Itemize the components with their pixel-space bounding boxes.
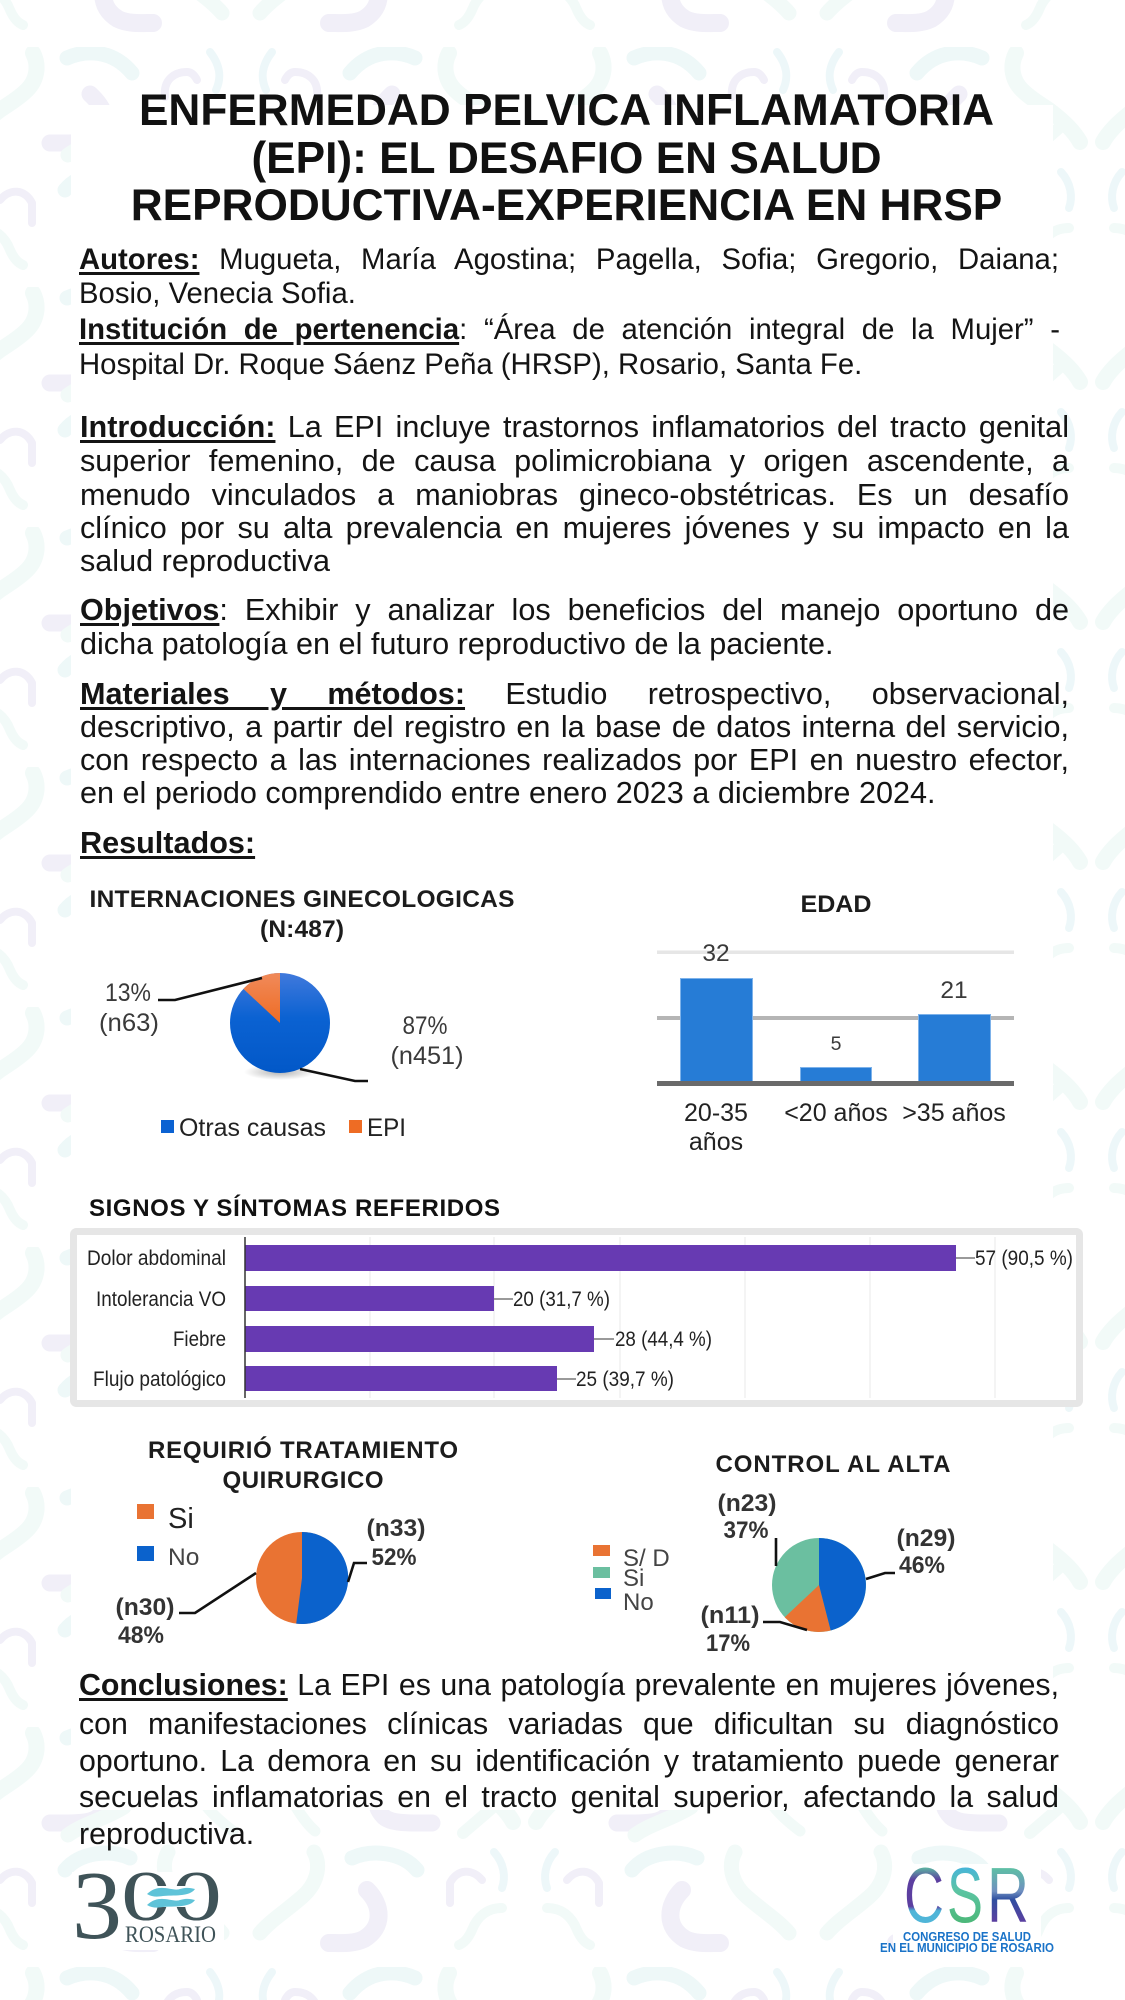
chart: requirio tratamiento quirurgico: [116, 1436, 458, 1649]
objectives: [80, 593, 1069, 661]
objectives: Objetivos: Exhibir y analizar los beneficios del manejo oportuno de: [80, 593, 1069, 627]
value labels: 20 (31,7 %): [513, 1287, 610, 1311]
conclusions: secuelas inflamatorias en el tracto genital superior, afectando la salud: [79, 1781, 1059, 1814]
chart title: [90, 886, 514, 943]
pie labels: [700, 1490, 956, 1657]
logo: CSR congreso de salud: [880, 1851, 1054, 1955]
category labels: Dolor abdominal: [87, 1246, 226, 1270]
chart title: INTERNACIONES GINECOLOGICAS: [90, 886, 514, 913]
pie legend: Otras causas: [179, 1114, 326, 1142]
chart: edad bars: [657, 891, 1014, 1156]
chart: signos y sintomas: [74, 1194, 1080, 1404]
chart: control al alta: [593, 1451, 956, 1657]
pie labels: (n33): [366, 1515, 426, 1542]
introduction: menudo vinculados a maniobras gineco-obstétricas. Es un desafío: [80, 478, 1069, 512]
logo: CSR congreso de salud: R: [987, 1851, 1029, 1939]
chart title: REQUIRIÓ TRATAMIENTO: [148, 1436, 458, 1464]
bars: [245, 1245, 956, 1391]
pie labels: 17%: [706, 1630, 750, 1657]
legend: [137, 1503, 199, 1571]
legend: No: [623, 1589, 654, 1616]
logo: CSR congreso de salud: C: [904, 1851, 944, 1939]
legend: Si: [623, 1565, 644, 1592]
logo: CSR congreso de salud: EN EL MUNICIPIO DE ROSARIO: [880, 1941, 1054, 1955]
pie: [230, 973, 330, 1080]
materials and methods: con respecto a las internaciones realizados por EPI en nuestro efector,: [80, 743, 1069, 777]
bars: [680, 978, 990, 1082]
category labels: <20 años: [784, 1099, 888, 1127]
introduction: salud reproductiva: [80, 544, 330, 578]
conclusions: oportuno. La demora en su identificación y tratamiento puede generar: [79, 1745, 1059, 1778]
bar values: 32: [702, 940, 730, 967]
pie labels: 52%: [372, 1544, 416, 1571]
pie labels: 48%: [118, 1622, 164, 1649]
legend: Si: [168, 1503, 194, 1535]
pie labels: (n29): [896, 1525, 956, 1552]
category labels: Intolerancia VO: [96, 1287, 226, 1311]
logo: 300 Rosario: [72, 1852, 222, 1960]
materials and methods: en el periodo comprendido entre enero 2023 a diciembre 2024.: [80, 776, 936, 810]
pie legend: [161, 1114, 406, 1142]
objectives: dicha patología en el futuro reproductivo de la paciente.: [80, 627, 833, 661]
pie: [256, 1532, 348, 1624]
category labels: [684, 1099, 1006, 1156]
chart title: EDAD: [800, 891, 872, 918]
authors and institution: Hospital Dr. Roque Sáenz Peña (HRSP), Rosario, Santa Fe.: [79, 348, 862, 381]
pie labels: 46%: [899, 1552, 945, 1579]
chart title: CONTROL AL ALTA: [716, 1451, 950, 1478]
introduction: Introducción: La EPI incluye trastornos inflamatorios del tracto genital: [80, 410, 1069, 444]
logo: 300 Rosario: 00: [121, 1858, 222, 1936]
title: ENFERMEDAD PELVICA INFLAMATORIA: [139, 86, 994, 135]
pie labels: 87%: [402, 1012, 448, 1040]
value labels: 57 (90,5 %): [975, 1246, 1073, 1270]
leader lines: [763, 1538, 895, 1630]
title: (EPI): EL DESAFIO EN SALUD: [251, 134, 882, 183]
category labels: >35 años: [902, 1099, 1006, 1127]
category labels: Flujo patológico: [93, 1367, 226, 1391]
pie labels: (n63): [99, 1009, 159, 1037]
pie legend: EPI: [367, 1114, 406, 1142]
introduction: superior femenino, de causa polimicrobiana y origen ascendente, a: [80, 444, 1069, 478]
introduction: clínico por su alta prevalencia en mujeres jóvenes y su impacto en la: [80, 511, 1069, 545]
pie labels: [99, 979, 464, 1070]
pie labels: (n451): [390, 1042, 464, 1070]
logo: 300 Rosario: 3: [72, 1852, 122, 1960]
pie labels: (n11): [700, 1602, 760, 1629]
chart title: SIGNOS Y SÍNTOMAS REFERIDOS: [89, 1194, 500, 1222]
logo: CSR congreso de salud: S: [947, 1851, 983, 1939]
value labels: 25 (39,7 %): [576, 1367, 674, 1391]
bar values: [702, 940, 968, 1055]
bar values: 21: [940, 977, 968, 1004]
authors and institution: Autores: Mugueta, María Agostina; Pagella, Sofia; Gregorio, Daiana;: [79, 243, 1059, 276]
pie labels: 37%: [724, 1517, 768, 1544]
legend: S/ D: [623, 1545, 670, 1572]
chart title: [148, 1436, 458, 1494]
legend: No: [168, 1544, 199, 1571]
value labels: [513, 1246, 1073, 1391]
chart title: (N:487): [260, 916, 344, 943]
title: REPRODUCTIVA-EXPERIENCIA EN HRSP: [131, 181, 1002, 230]
pie labels: (n30): [116, 1594, 174, 1621]
conclusions: reproductiva.: [79, 1818, 254, 1851]
authors and institution: Institución de pertenencia: “Área de atención integral de la Mujer” -: [79, 313, 1060, 346]
pie labels: 13%: [105, 979, 151, 1007]
logo: 300 Rosario: ROSARIO: [125, 1922, 216, 1947]
results heading: Resultados:: [80, 826, 255, 860]
authors and institution: Bosio, Venecia Sofia.: [79, 277, 356, 310]
conclusions: con manifestaciones clínicas variadas que dificultan su diagnóstico: [79, 1708, 1059, 1741]
chart title: QUIRURGICO: [222, 1467, 384, 1494]
conclusions: Conclusiones: La EPI es una patología prevalente en mujeres jóvenes,: [79, 1669, 1059, 1702]
materials and methods: descriptivo, a partir del registro en la base de datos interna del servicio,: [80, 710, 1069, 744]
pie labels: (n23): [718, 1490, 776, 1517]
chart frame: [74, 1232, 1080, 1404]
category labels: 20-35: [684, 1099, 748, 1127]
leader lines: [179, 1563, 367, 1613]
bar values: 5: [831, 1033, 842, 1055]
pie: [772, 1538, 866, 1632]
materials and methods: [80, 677, 1069, 810]
logo: CSR congreso de salud: CONGRESO DE SALUD: [903, 1930, 1031, 1944]
chart: internaciones ginecologicas pie: [90, 886, 514, 1142]
value labels: 28 (44,4 %): [615, 1327, 712, 1351]
materials and methods: Materiales y métodos: Estudio retrospectivo, observacional,: [80, 677, 1069, 711]
category labels: años: [689, 1128, 743, 1156]
pie labels: [116, 1515, 426, 1649]
title: [131, 86, 1002, 230]
authors and institution: [79, 243, 1060, 381]
introduction: [80, 410, 1069, 578]
category labels: [87, 1246, 226, 1391]
legend: [593, 1545, 670, 1616]
leader lines: [158, 978, 368, 1081]
category labels: Fiebre: [173, 1327, 226, 1351]
